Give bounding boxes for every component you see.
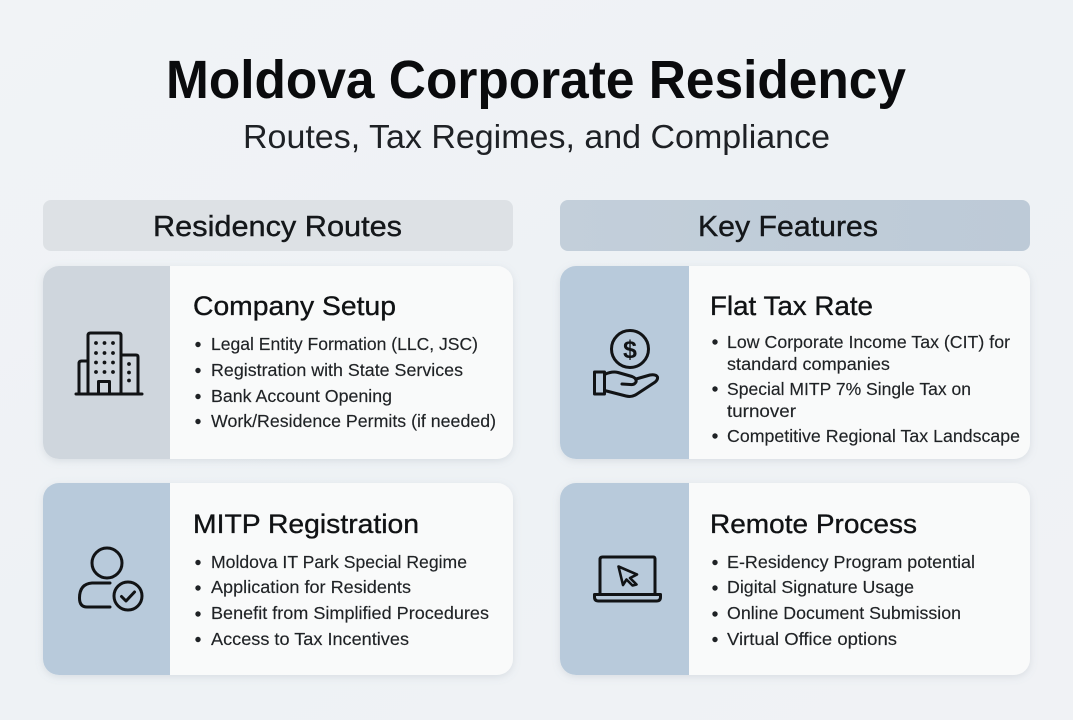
bullet list: Virtual Office options [727, 629, 897, 649]
bullet list: Digital Signature Usage [727, 577, 914, 597]
bullet list: turnover [727, 401, 796, 421]
icon: user with check [80, 548, 142, 610]
bullet list [712, 552, 975, 649]
card title: Remote Process [710, 509, 917, 539]
icon glyph: dollar sign: $ [623, 336, 637, 364]
subtitle: Routes, Tax Regimes, and Compliance [243, 118, 830, 155]
card title: Flat Tax Rate [710, 291, 873, 321]
panel: Company Setup [43, 266, 513, 459]
heading: Residency Routes [43, 200, 513, 251]
heading: Key Features [560, 200, 1030, 251]
icon: hand holding coin [594, 330, 658, 396]
card title: Company Setup [193, 291, 396, 321]
bullet list: Legal Entity Formation (LLC, JSC) [211, 334, 478, 354]
title: Moldova Corporate Residency [166, 50, 906, 110]
bullet list: Registration with State Services [211, 360, 463, 380]
bullet list: Moldova IT Park Special Regime [211, 552, 467, 572]
heading: Residency Routes: Residency Routes [153, 211, 402, 243]
heading: Key Features: Key Features [698, 211, 878, 243]
bullet list: Bank Account Opening [211, 386, 392, 406]
bullet list: Competitive Regional Tax Landscape [727, 426, 1020, 446]
bullet list: E-Residency Program potential [727, 552, 975, 572]
panel: Flat Tax Rate [560, 266, 1030, 459]
bullet list: Online Document Submission [727, 603, 961, 623]
bullet list: Special MITP 7% Single Tax on [727, 379, 971, 399]
bullet list [195, 334, 496, 431]
bullet list: Low Corporate Income Tax (CIT) for [727, 332, 1010, 352]
bullet list: Access to Tax Incentives [211, 629, 409, 649]
bullet list [712, 332, 1020, 446]
panel: MITP Registration [43, 483, 513, 675]
bullet list: Work/Residence Permits (if needed) [211, 411, 496, 431]
panel: Remote Process [560, 483, 1030, 675]
icon: laptop with cursor [594, 557, 660, 601]
card title: MITP Registration [193, 509, 419, 539]
bullet list: Benefit from Simplified Procedures [211, 603, 489, 623]
bullet list: standard companies [727, 354, 890, 374]
bullet list: Application for Residents [211, 577, 411, 597]
bullet list [195, 552, 489, 649]
icon: office buildings [76, 333, 142, 394]
